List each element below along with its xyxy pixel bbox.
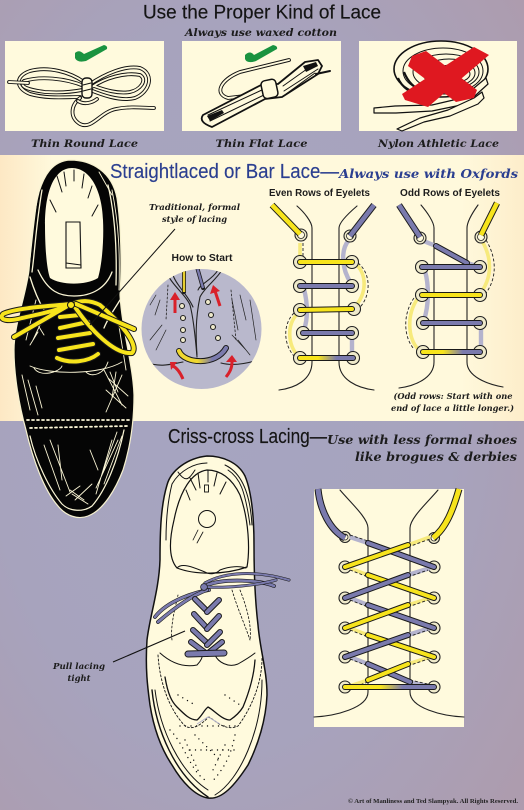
round lace illustration [9,67,154,125]
heading: straightlaced [110,161,518,183]
panel: thin flat lace [182,41,341,131]
sole of shoe opening [45,168,103,284]
flat lace illustration [202,60,330,127]
note: odd rows: end of lace a little longer.) [391,403,514,413]
even rows heading: Even Rows of Eyelets [269,188,370,199]
heading: criss-cross: Criss-cross Lacing— [168,426,327,448]
caption: nylon athletic lace: Nylon Athletic Lace [377,139,499,150]
red arrows [170,285,237,379]
panel: nylon athletic lace [359,41,517,131]
odd rows diagram [399,203,503,388]
note: odd rows: (Odd rows: Start with one [394,391,512,401]
callout: pull lacing tight [52,631,185,683]
panel: straightlaced band [0,155,524,421]
eyelets [339,532,440,693]
heading: criss-cross [168,426,517,464]
heading: criss-cross: like brogues & derbies [355,449,517,464]
panel: thin round lace [5,41,164,131]
icon: red X [402,47,489,107]
title: Use the Proper Kind of Lace [143,2,381,24]
callout: pull lacing tight: tight [68,673,91,683]
cream brogue shoe [146,456,289,798]
heading: straightlaced: Always use with Oxfords [338,166,518,181]
black oxford shoe [2,160,134,518]
callout: traditional lacing: style of lacing [162,214,227,224]
how to start circle [142,267,262,389]
callout: traditional lacing: Traditional, formal [149,202,240,212]
heading: criss-cross: Use with less formal shoes [327,432,517,447]
odd rows heading: Odd Rows of Eyelets [400,188,500,199]
yellow bar lacing [2,301,134,361]
nylon lace illustration [374,41,488,131]
how to start heading: How to Start [172,252,233,264]
purple criss-cross lacing [155,574,289,654]
icon: green check [245,45,277,62]
caption: thin round lace: Thin Round Lace [31,139,138,150]
callout: pull lacing tight: Pull lacing [52,661,105,671]
heading: straightlaced: Straightlaced or Bar Lace— [110,161,339,183]
pale hidden lace segments [347,535,432,689]
even rows diagram [272,205,374,390]
icon: green check [75,45,107,62]
caption: thin flat lace: Thin Flat Lace [216,139,308,150]
lace ends [318,489,459,538]
copyright: © Art of Manliness and Ted Slampyak. All Rights Reserved. [348,798,519,805]
subtitle: Always use waxed cotton [184,27,337,39]
criss-cross laces [345,543,434,687]
callout: traditional lacing [90,202,240,325]
note: odd rows [391,391,514,413]
panel: criss-cross diagram [314,489,464,727]
